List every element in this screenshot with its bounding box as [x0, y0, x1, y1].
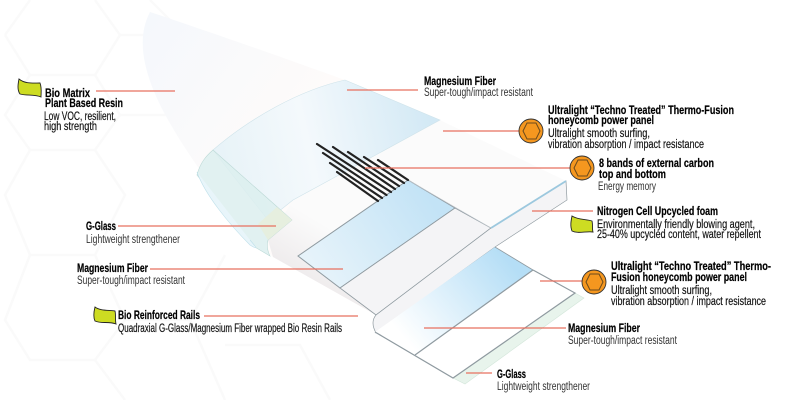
callout: magnesium fiber bottom: Super-tough/impact resistant	[568, 335, 678, 347]
callout: magnesium fiber bottom	[424, 321, 678, 347]
callout: magnesium fiber top: Super-tough/impact resistant	[424, 87, 534, 99]
callout: bio reinforced rails: Bio Reinforced Rails	[118, 308, 200, 322]
callout: magnesium fiber bottom: Magnesium Fiber	[568, 321, 640, 335]
upper blue carbon panel	[298, 180, 455, 288]
icon: green leaf	[94, 307, 116, 324]
surfboard illustration	[143, 12, 584, 384]
callout: honeycomb power panel top: honeycomb power panel	[548, 113, 654, 127]
callout: g-glass left: G-Glass	[86, 219, 116, 233]
callout: honeycomb power panel bottom: Ultralight smooth surfing,	[611, 285, 712, 297]
callout: honeycomb power panel bottom	[540, 259, 771, 308]
callout: magnesium fiber left: Magnesium Fiber	[77, 261, 148, 275]
callout: nitrogen cell foam: Environmentally friendly blowing agent,	[597, 219, 755, 231]
lower blue panel	[375, 247, 533, 355]
callout: carbon bands: 8 bands of external carbon	[599, 156, 714, 170]
icon: orange hexagon badge	[519, 119, 543, 143]
callout: g-glass bottom: Lightweight strengthener	[497, 381, 590, 393]
callout: g-glass bottom	[466, 367, 590, 393]
background honeycomb pattern	[5, 0, 330, 400]
callout: g-glass left: Lightweight strengthener	[86, 234, 180, 246]
callout: bio matrix: Low VOC, resilient,	[44, 111, 116, 123]
upper grey panel	[340, 208, 491, 315]
tail g-glass layer	[453, 293, 584, 384]
callout: carbon bands: top and bottom	[599, 167, 666, 181]
callout: magnesium fiber top: Magnesium Fiber	[424, 74, 496, 88]
board nose: bio matrix resin	[143, 12, 567, 333]
callout: g-glass left	[86, 219, 276, 246]
callout: bio reinforced rails: Quadraxial G-Glass/Magnesium Fiber wrapped Bio Resin Rails	[118, 323, 342, 335]
callout: honeycomb power panel top	[443, 103, 734, 151]
callout: magnesium fiber left: Super-tough/impact resistant	[77, 275, 186, 287]
callout: honeycomb power panel top: vibration absorption / impact resistance	[548, 139, 704, 151]
blue rail highlight	[491, 181, 566, 228]
rail band	[373, 181, 567, 333]
callout: honeycomb power panel top: Ultralight “Techno Treated” Thermo-Fusion	[548, 103, 734, 117]
callout: magnesium fiber left	[77, 261, 343, 287]
callout: magnesium fiber top	[347, 74, 534, 99]
eight carbon bands	[317, 144, 408, 201]
callout: bio matrix: Plant Based Resin	[45, 96, 123, 110]
magnesium fiber top layer	[213, 80, 440, 220]
icon: green leaf	[18, 79, 41, 97]
icon: orange hexagon badge	[570, 156, 594, 180]
callout: nitrogen cell foam: Nitrogen Cell Upcycled foam	[597, 204, 718, 218]
front g-glass layer	[197, 150, 292, 256]
icon: orange hexagon badge	[582, 270, 606, 294]
callout: carbon bands	[365, 156, 714, 193]
callout: carbon bands: Energy memory	[598, 181, 656, 193]
honeycomb deck panel	[268, 120, 566, 315]
callout: bio matrix: high strength	[44, 121, 97, 133]
callout: bio reinforced rails	[94, 307, 358, 335]
callout: g-glass bottom: G-Glass	[497, 367, 526, 381]
callout: honeycomb power panel bottom: Fusion honeycomb power panel	[611, 270, 747, 284]
lower white panel	[415, 270, 575, 378]
callout: bio matrix	[18, 79, 175, 133]
callout: bio matrix: Bio Matrix	[45, 86, 90, 100]
callout: nitrogen cell foam	[532, 204, 762, 241]
callout: honeycomb power panel top: Ultralight smooth surfing,	[548, 128, 650, 140]
icon: green leaf	[571, 216, 593, 232]
